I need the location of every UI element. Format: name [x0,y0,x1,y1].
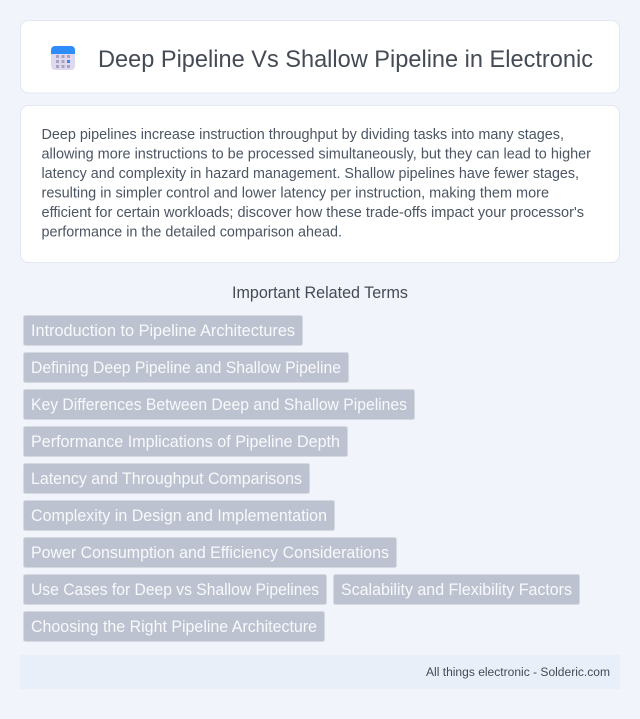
tag: power: Power Consumption and Efficiency Considerations [31,544,389,562]
panel: description: efficient for certain workloads; discover how these trade-offs impact your processor's [42,205,584,221]
tag: power [24,538,396,568]
tag: performance: Performance Implications of Pipeline Depth [31,433,340,451]
tag: use cases: Use Cases for Deep vs Shallow Pipelines [31,581,319,599]
tag: latency [24,464,310,494]
tag: choosing [24,612,324,642]
tag: scalability [334,574,580,604]
tag: performance [24,426,348,456]
footer: All things electronic - Solderic.com [426,665,610,679]
tag: use cases [24,574,326,604]
tag: scalability: Scalability and Flexibility Factors [341,581,572,599]
title: Deep Pipeline Vs Shallow Pipeline in Electronic [98,46,593,73]
tag: key differences [24,390,414,420]
panel: description: allowing more instructions to be processed simultaneously, but they can lead to higher [42,146,591,162]
panel: description [20,106,620,262]
tag: choosing: Choosing the Right Pipeline Architecture [31,618,317,636]
tag: introduction [24,316,302,346]
tag: defining [24,352,348,382]
panel: description: latency and complexity in hazard management. Shallow pipelines have fewer stages, [42,166,579,182]
footer [20,655,620,689]
header panel [20,20,620,93]
tag: latency: Latency and Throughput Comparisons [31,470,302,488]
panel: description: resulting in simpler control and lower latency per instruction, making them more [42,186,549,202]
tag: complexity: Complexity in Design and Implementation [31,507,327,525]
panel: description: Deep pipelines increase instruction throughput by dividing tasks into many stages, [42,127,564,143]
heading: related terms: Important Related Terms [232,284,408,302]
panel: description: performance in the detailed comparison ahead. [42,224,342,240]
tag: key differences: Key Differences Between Deep and Shallow Pipelines [31,396,407,414]
icon: calendar grid [51,46,75,70]
tag: defining: Defining Deep Pipeline and Shallow Pipeline [31,359,341,377]
tag: complexity [24,500,334,530]
tag: introduction: Introduction to Pipeline Architectures [31,322,295,340]
